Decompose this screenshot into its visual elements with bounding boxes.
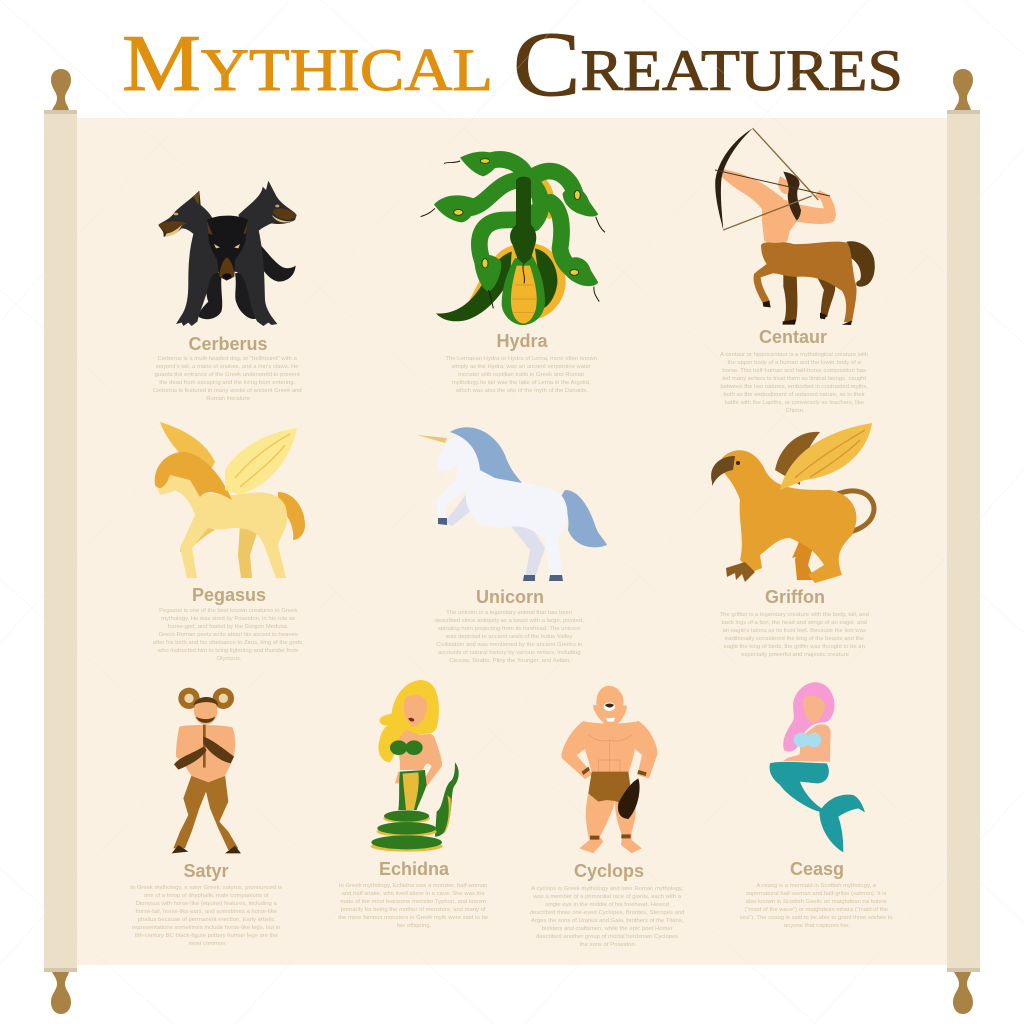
description: Hydra: which was also the site of the myth of the Danaids. [455,388,589,394]
icon: Ceasg [770,682,865,852]
description: Cyclops: builders and craftsmen, while the epic poet Homer [542,926,673,932]
icon: Centaur [715,128,875,325]
description: Unicorn: Ctesias, Strabo, Pliny the Younger, and Aelian. [449,658,571,664]
description: Cerberus: the dead from escaping and the living from entering. [159,380,295,386]
description: Satyr: 6th-century BC black-figure pottery human legs are the [135,933,278,939]
description: Cyclops: was a member of a primordial race of giants, each with a [532,894,682,900]
description: Cerberus: serpent's tail, a mane of snakes, and a lion's claws. He [156,364,299,370]
description: Hydra: simply as the Hydra, was an ancient serpentine water [451,364,591,370]
panel: Satyr [130,688,284,947]
description: Satyr: In Greek mythology, a satyr Greek: satyros, pronounced is [130,885,282,891]
description: Echidna: mate of the most fearsome monster Typhon, and known [340,899,486,905]
description: Cerberus: Cerberus is a multi-headed dog, or "hellhound" with a [158,356,297,362]
description: Griffon: traditionally considered the king of the beasts and the [725,636,864,642]
description: Pegasus: Pegasus is one of the best known creatures in Greek [159,608,297,614]
parchment panel [77,118,947,965]
icon: Pegasus [155,422,305,578]
description: Griffon: eagle the king of birds, the griffin was thought to be an [723,644,865,650]
heading: Satyr: Satyr [183,861,229,881]
left roller [44,69,77,1014]
description: Cyclops: single eye in the middle of his forehead. Hesiod [545,902,669,908]
description: Unicorn: Civilization and was mentioned by the ancient Greeks in [436,642,582,648]
panel: Hydra [421,152,605,394]
description: Satyr: representations sometimes include horse-like legs, but in [132,925,280,931]
description: Unicorn: described since antiquity as a beast with a large, pointed, [435,618,584,624]
description: Centaur: Chiron. [786,408,805,414]
description: Pegasus: mythology. He was sired by Poseidon, in his role as [161,616,295,622]
heading: Centaur: Centaur [759,327,827,347]
description: Ceasg: sea"). The ceasg is said to be able to grant three wishes to [740,915,893,921]
description: Centaur: led many writers to treat them as liminal beings, caught [722,376,866,382]
panel: Cerberus [153,181,303,402]
description: Cerberus: guards the entrance of the Greek underworld to prevent [155,372,300,378]
description: Satyr: phallus because of permanent erection. Early artistic [138,917,275,923]
description: Griffon: The griffon is a legendary creature with the body, tail, and [719,612,869,618]
description: Echidna: the more famous monsters in Greek myth were said to be [338,915,489,921]
heading: Cerberus: Cerberus [188,334,268,354]
description: Ceasg: A ceasg is a mermaid in Scottish mythology, a [756,883,877,889]
description: Unicorn: accounts of natural history by various writers, including [438,650,581,656]
description: Unicorn: spiraling horn projecting from its forehead. The unicorn [438,626,581,632]
title word: Mythical: MYTHICAL [122,20,493,108]
description: Griffon: back legs of a lion, the head and wings of an eagle, and [721,620,867,626]
description: Pegasus: who instructed him to bring lightning and thunder from [157,648,299,654]
description: Satyr: most common [188,941,226,947]
panel: Cyclops [530,686,686,948]
description: Unicorn: was depicted in ancient seals of the Indus Valley [445,634,572,640]
icon: Cerberus [158,181,297,326]
description: Hydra: mythology.Its lair was the lake of Lerna in the Argolid, [452,380,591,386]
panel: Ceasg [740,682,894,929]
panel: Echidna [338,680,490,929]
description: Centaur: horse. This half-human and half-horse composition has [722,368,866,374]
description: Cerberus: Cerberus is featured in many works of ancient Greek and [153,388,302,394]
description: Griffon: especially powerful and majestic creature [741,652,850,658]
title [122,13,903,115]
description: Satyr: Dionysus with horse-like (equine) features, including a [136,901,277,907]
description: Echidna: primarily for being the mother of monsters, and many of [341,907,486,913]
description: Ceasg: also known in Scottish Gaelic as maighdean na tuinne [746,899,887,905]
description: Cerberus: Roman literature [206,396,250,402]
panel: Griffon [711,423,874,658]
icon: Echidna [371,680,459,852]
description: Ceasg: supernatural half-woman and half-grilse (salmon). It is [746,891,886,897]
description: Satyr: horse-tail, horse-like ears, and sometimes a horse-like [135,909,278,915]
description: Pegasus: after his birth and his obeisance to Zeus, king of the gods, [153,640,304,646]
right roller [947,69,980,1014]
heading: Unicorn: Unicorn [476,587,544,607]
description: Unicorn: The unicorn is a legendary animal that has been [446,610,572,616]
heading: Hydra: Hydra [496,331,548,351]
description: Griffon: an eagle's talons as its front feet. Because the lion was [723,628,866,634]
description: Hydra: monster with reptilian traits in Greek and Roman [458,372,584,378]
panel: Pegasus [153,422,305,662]
description: Centaur: battle with the Lapiths, or conversely as teachers, like [724,400,865,406]
panel: Centaur [715,128,875,414]
icon: Griffon [711,423,874,583]
icon: Hydra [421,152,605,325]
heading: Ceasg: Ceasg [790,859,844,879]
icon: Cyclops [561,686,657,853]
description: Pegasus: horse-god, and foaled by the Gorgon Medusa. [168,624,289,630]
icon: Unicorn [417,427,607,581]
description: Ceasg: anyone that captures her. [784,923,851,929]
description: Hydra: The Lernaean Hydra or Hydra of Lerna, more often known [445,356,597,362]
description: Cyclops: Arges the sons of Uranus and Gaia, brothers of the Titans, [531,918,684,924]
panel: Unicorn [417,427,607,664]
description: Pegasus: Olympus. [217,656,242,662]
title word: Creatures: REATURES [580,38,903,103]
description: Echidna: In Greek mythology, Echidna was a monster, half-woman [339,883,487,889]
title word: Creatures: C [513,13,580,115]
description: Centaur: both as the embodiment of untamed nature, as in their [723,392,865,398]
description: Pegasus: Greco-Roman poets write about his ascent to heaven [159,632,298,638]
description: Echidna: her offspring. [397,923,431,929]
description: Centaur: the upper body of a human and the lower body of a [728,360,862,366]
description: Echidna: and half snake, who lived alone in a cave. She was the [342,891,485,897]
description: Cyclops: A cyclops is Greek mythology and later Roman mythology, [531,886,683,892]
description: Centaur: between the two natures, embodied in contrasted myths, [720,384,868,390]
description: Cyclops: described three one-eyed Cyclopes, Brontes, Steropes and [530,910,684,916]
heading: Griffon: Griffon [765,587,825,607]
description: Cyclops: described another group of mortal herdsmen Cyclopes [536,934,678,940]
description: Ceasg: ("maid of the wave") or maighdean mhara ("maid of the [744,907,889,913]
heading: Pegasus: Pegasus [192,585,266,605]
heading: Cyclops: Cyclops [574,861,644,881]
description: Cyclops: the sons of Poseidon. [580,942,637,948]
description: Centaur: A centaur or hippocentaur is a mythological creature with [720,352,868,358]
description: Satyr: one of a troop of ithyphallic male companions of [144,893,269,899]
icon: Satyr [172,688,241,853]
heading: Echidna: Echidna [379,859,450,879]
